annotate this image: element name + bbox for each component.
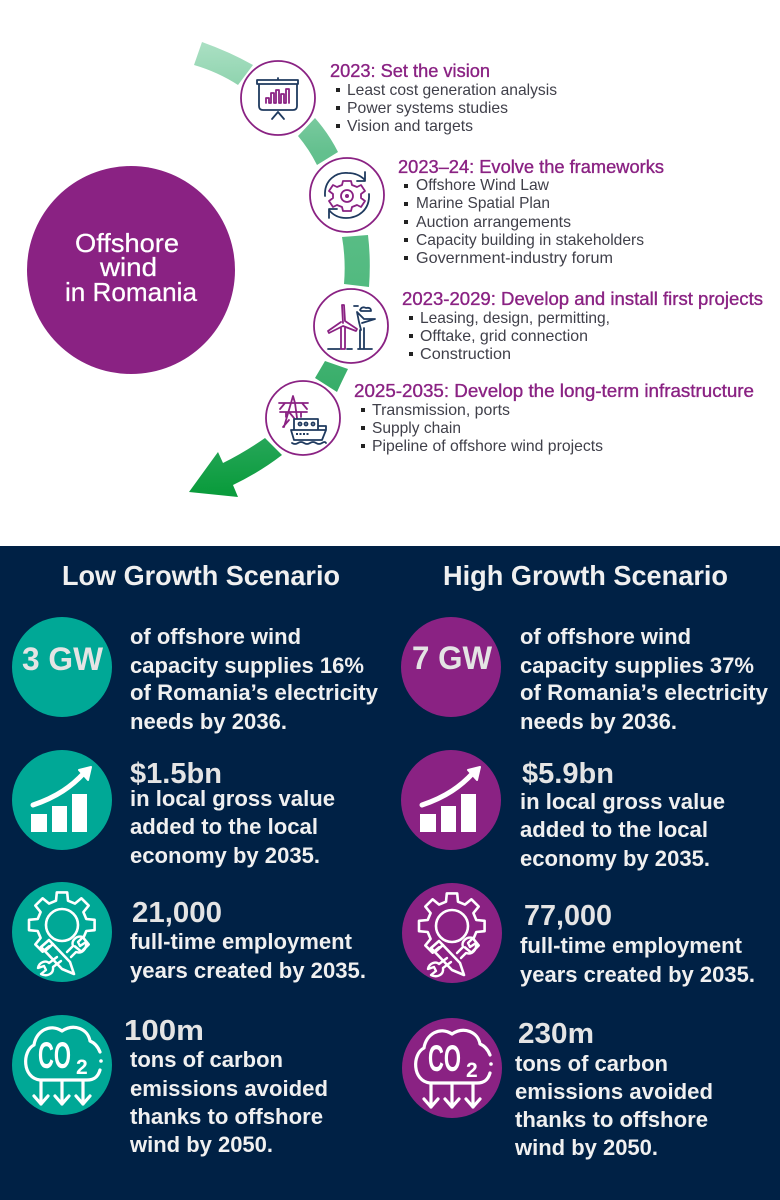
high growth scenario column [401, 560, 768, 1160]
stat: 3 GW capacity: of Romania’s electricity [130, 680, 378, 705]
stat: gross value added: $5.9bn [522, 758, 614, 790]
stat: 7 GW capacity: 7 GW [412, 640, 493, 676]
step 2 text: 2023–24: Evolve the frameworks [398, 157, 664, 177]
stat: gross value added: economy by 2035. [520, 846, 710, 871]
stat: carbon avoided: emissions avoided [130, 1076, 328, 1101]
stat: 7 GW capacity: needs by 2036. [520, 709, 677, 734]
step 3 text: Offtake, grid connection [420, 328, 588, 345]
stat: employment [402, 883, 755, 987]
stat: gross value added [12, 750, 335, 868]
stat: carbon avoided: 100m [124, 1015, 204, 1047]
curved green timeline arrow [189, 42, 370, 497]
stat: 7 GW capacity [401, 617, 768, 734]
stat: 7 GW capacity: of offshore wind [520, 624, 691, 649]
stat: gross value added: $1.5bn [130, 758, 222, 790]
stat: gross value added: in local gross value [130, 786, 335, 811]
step 2 text [398, 157, 664, 267]
stat: gross value added: economy by 2035. [130, 843, 320, 868]
step 3 text: Construction [420, 346, 511, 363]
step 4 text: Pipeline of offshore wind projects [372, 438, 603, 455]
icon: presentation board [241, 61, 315, 135]
step 3 text: 2023-2029: Develop and install first projects [402, 289, 763, 309]
stat: gross value added: added to the local [520, 817, 708, 842]
low growth scenario column [12, 560, 378, 1157]
stat: 7 GW capacity: of Romania’s electricity [520, 680, 768, 705]
bottom panel: scenarios [0, 546, 780, 1200]
stat: carbon avoided: tons of carbon [130, 1047, 283, 1072]
stat: carbon avoided: emissions avoided [515, 1079, 713, 1104]
main circle: Offshore wind in Romania [27, 166, 235, 374]
main circle: Offshore wind in Romania: wind [99, 252, 157, 282]
icon: gear with cycle arrows [310, 158, 384, 232]
stat: carbon avoided: tons of carbon [515, 1051, 668, 1076]
step 1 text: Least cost generation analysis [347, 82, 557, 99]
stat: employment: years created by 2035. [130, 958, 366, 983]
step 3 text: Leasing, design, permitting, [420, 310, 610, 327]
stat: gross value added: added to the local [130, 814, 318, 839]
step 1 text: 2023: Set the vision [330, 61, 490, 81]
main circle: Offshore wind in Romania: Offshore [75, 228, 179, 258]
stat: carbon avoided: wind by 2050. [514, 1135, 658, 1160]
step 3 text [402, 289, 763, 363]
icon: wind turbines [314, 289, 388, 363]
step 4 text [354, 381, 754, 455]
step 4 text: Supply chain [372, 420, 461, 437]
step 2 text: Government-industry forum [416, 250, 613, 267]
stat: employment: full-time employment [130, 929, 352, 954]
step 2 text: Capacity building in stakeholders [416, 232, 644, 249]
step 1 text [330, 61, 557, 135]
stat: carbon avoided: wind by 2050. [129, 1132, 273, 1157]
heading: high growth: High Growth Scenario [443, 560, 728, 591]
stat: 3 GW capacity: capacity supplies 16% [130, 653, 364, 678]
icon: pylon and ship [266, 381, 340, 455]
stat: carbon avoided: 230m [518, 1018, 594, 1050]
stat: employment: 77,000 [524, 900, 612, 932]
stat: 7 GW capacity: capacity supplies 37% [520, 653, 754, 678]
stat: 3 GW capacity [12, 617, 378, 734]
step 1 text: Power systems studies [347, 100, 508, 117]
main circle: Offshore wind in Romania: in Romania [65, 277, 198, 307]
stat: carbon avoided: thanks to offshore [515, 1107, 708, 1132]
stat: employment: years created by 2035. [520, 962, 755, 987]
stat: employment [12, 882, 366, 983]
stat: carbon avoided: thanks to offshore [130, 1104, 323, 1129]
stat: gross value added: in local gross value [520, 789, 725, 814]
step 2 text: Offshore Wind Law [416, 177, 549, 194]
step 1 text: Vision and targets [347, 118, 473, 135]
stat: carbon avoided [402, 1018, 713, 1160]
stat: gross value added [401, 750, 725, 871]
stat: employment: full-time employment [520, 933, 742, 958]
stat: carbon avoided [12, 1015, 328, 1157]
step 4 text: 2025-2035: Develop the long-term infrastructure [354, 381, 754, 401]
step 4 text: Transmission, ports [372, 402, 510, 419]
stat: 3 GW capacity: 3 GW [22, 641, 104, 677]
step 2 text: Auction arrangements [416, 214, 571, 231]
step 2 text: Marine Spatial Plan [416, 195, 550, 212]
stat: employment: 21,000 [132, 897, 222, 929]
top panel: roadmap [0, 0, 780, 546]
heading: low growth: Low Growth Scenario [62, 560, 340, 591]
stat: 3 GW capacity: needs by 2036. [130, 709, 287, 734]
stat: 3 GW capacity: of offshore wind [130, 624, 301, 649]
